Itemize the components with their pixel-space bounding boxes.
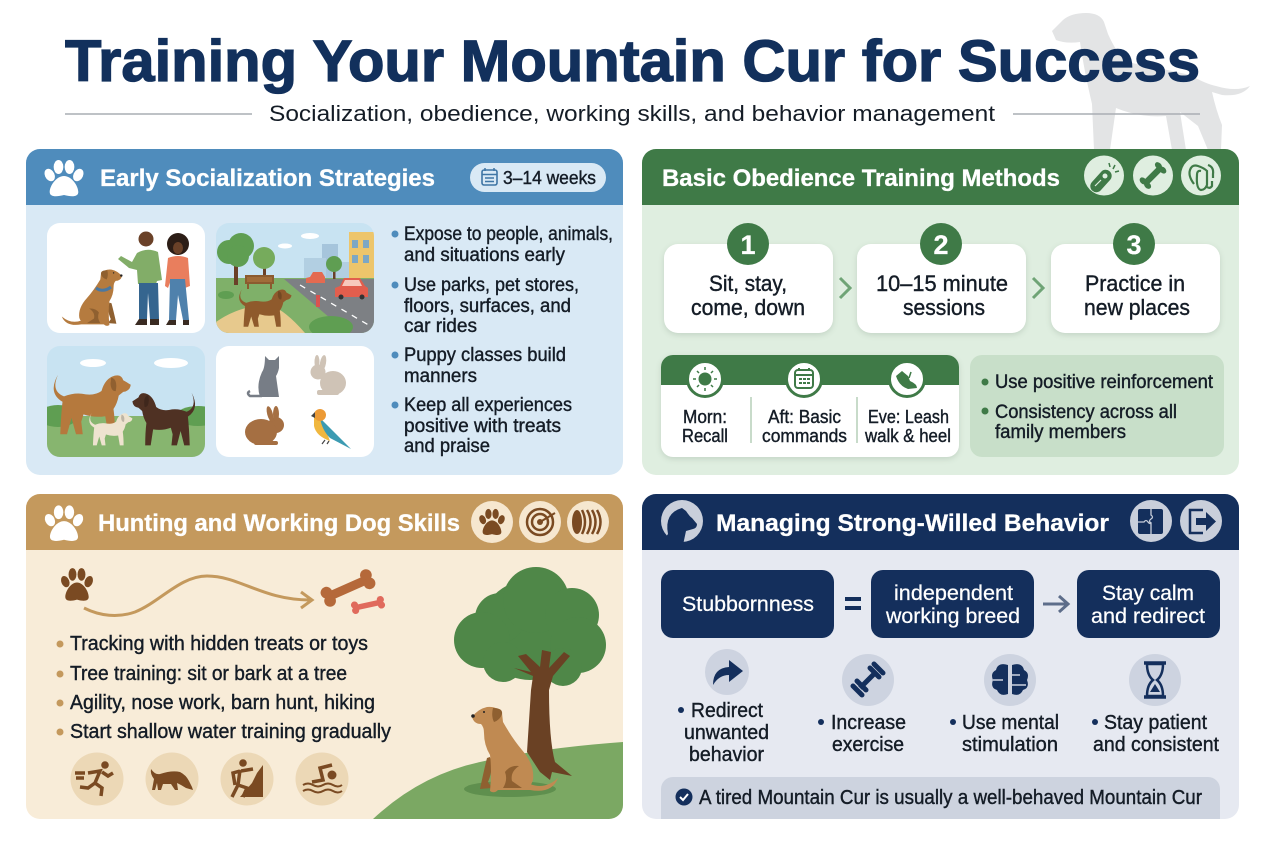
bullets: hunting skills: Tree training: sit or bark at a tree — [70, 663, 347, 685]
step 2: 10–15 minute — [876, 271, 1008, 296]
icon: dog head — [660, 500, 703, 545]
tip: mental stimulation: Use mental — [962, 712, 1059, 734]
image: park and street scene — [216, 223, 374, 338]
badge: 3-14 weeks — [470, 163, 606, 192]
bullets: hunting skills — [56, 633, 391, 743]
bullets: socialization — [392, 224, 613, 457]
icon: bone — [1133, 156, 1173, 196]
daily schedule card — [661, 355, 959, 457]
scent trail — [59, 567, 386, 615]
arrow: step 2 to 3 — [1033, 278, 1043, 298]
box: stay calm: and redirect — [1091, 605, 1205, 628]
daily schedule card: Aft: Basic — [768, 407, 841, 427]
step 2 — [857, 223, 1026, 333]
tip: redirect: behavior — [689, 744, 764, 766]
illustration: dog at tree — [373, 567, 623, 819]
step 3: Practice in — [1085, 271, 1185, 296]
tips box: Consistency across all — [995, 402, 1177, 423]
callout: tired dog: A tired Mountain Cur is usually a well-behaved Mountain Cur — [699, 787, 1202, 809]
image: dogs in a field — [47, 346, 205, 457]
tip: patience: Stay patient — [1104, 712, 1207, 734]
icon: sniffing dog — [146, 752, 198, 806]
tip: exercise — [818, 654, 906, 756]
tips box: Use positive reinforcement — [995, 372, 1214, 393]
box: stay calm: Stay calm — [1102, 582, 1194, 605]
heading: hunting: Hunting and Working Dog Skills — [98, 510, 460, 537]
daily schedule card: Recall — [682, 426, 728, 446]
tips box: family members — [995, 422, 1126, 443]
icon: puzzle — [1130, 500, 1172, 542]
heading: early socialization: Early Socialization Strategies — [100, 165, 435, 192]
bullets: hunting skills: Start shallow water training gradually — [70, 721, 391, 743]
step 1: come, down — [691, 295, 805, 320]
tip: redirect — [678, 649, 769, 766]
tip: exercise: exercise — [832, 734, 904, 756]
icon: exit arrow — [1180, 500, 1222, 542]
bullets: socialization: car rides — [404, 316, 477, 337]
icon: white paw — [43, 160, 85, 196]
title: Training Your Mountain Cur for Success — [65, 29, 1200, 94]
bullets: hunting skills: Agility, nose work, barn hunt, hiking — [70, 692, 375, 714]
step 1: Sit, stay, — [709, 271, 787, 296]
icon: white paw — [43, 505, 85, 541]
icon: long line coil — [567, 501, 609, 543]
callout: tired dog — [661, 777, 1220, 819]
tip: exercise: Increase — [831, 712, 906, 734]
panel: early socialization — [26, 149, 623, 475]
icon: runner — [70, 752, 124, 806]
heading: basic obedience: Basic Obedience Training Methods — [662, 165, 1060, 192]
bullets: socialization: Use parks, pet stores, — [404, 275, 579, 296]
box: stubbornness: Stubbornness — [682, 593, 814, 616]
icon: target — [519, 501, 561, 543]
tip: patience: and consistent — [1093, 734, 1219, 756]
tip: mental stimulation — [950, 654, 1059, 756]
image: dog meets people — [47, 223, 205, 333]
bullets: socialization: Keep all experiences — [404, 395, 572, 416]
icon: leash — [1181, 156, 1221, 196]
tip: mental stimulation: stimulation — [962, 734, 1058, 756]
box: independent breed: independent — [894, 582, 1013, 605]
bullets: socialization: and praise — [404, 436, 490, 457]
bullets: socialization: floors, surfaces, and — [404, 296, 571, 317]
box: stay calm — [1077, 570, 1220, 638]
step 3 — [1051, 223, 1220, 333]
arrow — [1043, 596, 1068, 612]
bullets: socialization: Puppy classes build — [404, 345, 566, 366]
daily schedule card: Eve: Leash — [868, 407, 949, 427]
arrow: step 1 to 2 — [840, 278, 850, 298]
watermark: dog silhouette — [1052, 13, 1250, 150]
step 3: new places — [1084, 295, 1190, 320]
tip: redirect: unwanted — [684, 722, 769, 744]
tip: patience — [1092, 654, 1219, 756]
icon: paw print — [471, 501, 513, 543]
bullets: socialization: and situations early — [404, 245, 565, 266]
heading: strong-willed: Managing Strong-Willed Behavior — [716, 510, 1109, 537]
equals sign — [845, 597, 861, 610]
icon: climber — [220, 752, 274, 806]
bullets: socialization: manners — [404, 366, 477, 387]
box: stubbornness — [661, 570, 834, 638]
image: other animals — [216, 346, 374, 457]
panel: hunting and working — [26, 494, 623, 819]
step 2: sessions — [903, 295, 985, 320]
daily schedule card: commands — [762, 426, 847, 446]
bullets: socialization: Expose to people, animals, — [404, 224, 613, 245]
subtitle: Socialization, obedience, working skills, and behavior management — [269, 101, 996, 126]
step 1 — [664, 223, 833, 333]
step 2: 2 — [933, 230, 949, 260]
tip: redirect: Redirect — [691, 700, 763, 722]
step 3: 3 — [1126, 230, 1142, 260]
panel: strong-willed behavior — [642, 494, 1239, 819]
daily schedule card: walk & heel — [864, 426, 951, 446]
bullets: socialization: positive with treats — [404, 416, 561, 437]
icon: swimmer — [296, 752, 348, 806]
panel: basic obedience — [642, 149, 1239, 475]
bullets: hunting skills: Tracking with hidden treats or toys — [70, 633, 368, 655]
badge: 3-14 weeks: 3–14 weeks — [503, 168, 596, 188]
box: independent breed: working breed — [885, 605, 1020, 628]
icon: clicker — [1084, 156, 1124, 196]
tips box — [970, 355, 1224, 457]
box: independent breed — [871, 570, 1034, 638]
daily schedule card: Morn: — [683, 407, 727, 427]
step 1: 1 — [740, 230, 756, 260]
